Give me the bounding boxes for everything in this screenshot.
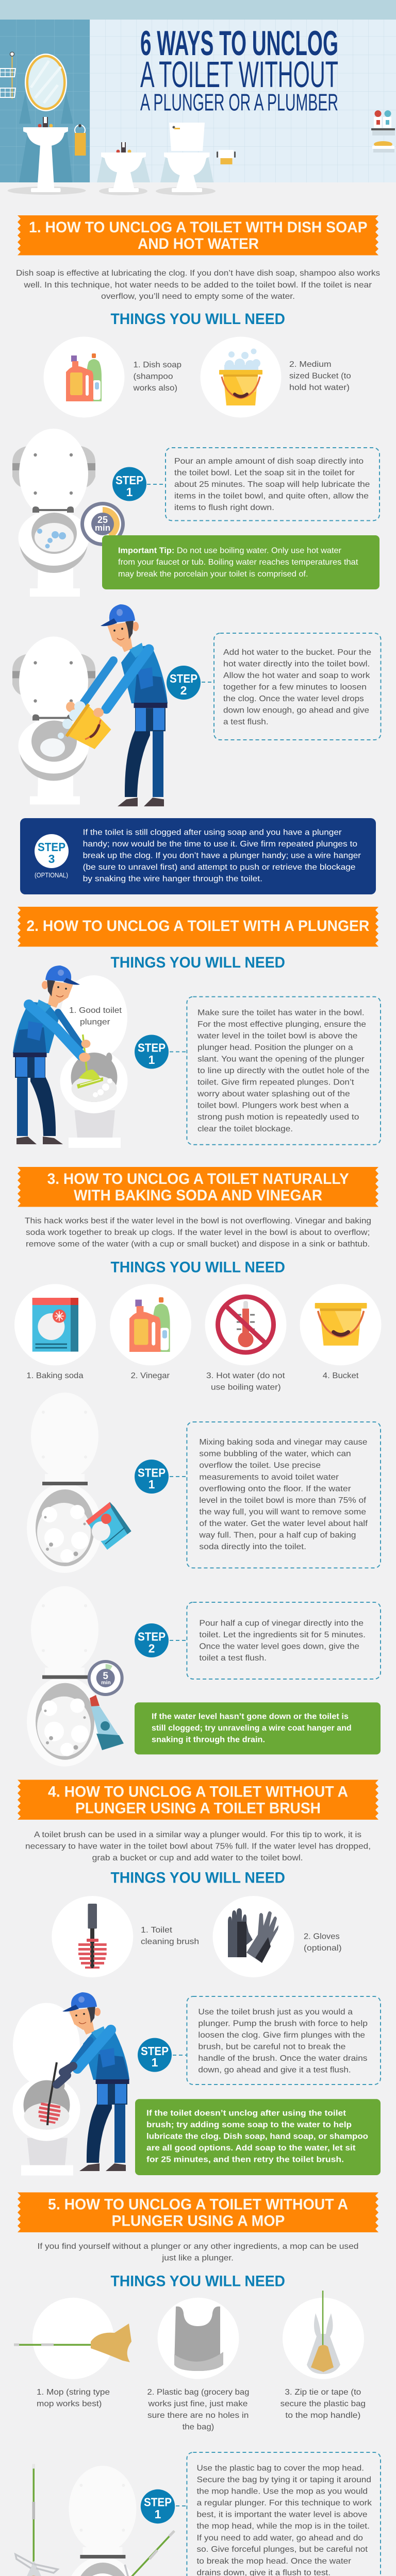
step 1 text box [187,997,381,1145]
item: bucket [200,337,351,417]
item: plunger label [69,1006,122,1026]
step 3 optional panel: handy; now would be the time to use it. Give firm repeated plunges to [83,840,357,849]
timer: 25 min [80,502,125,546]
intro text 3 [25,1217,371,1249]
step 2 badge [135,1623,169,1657]
step 1 text box: to break the mop head. Once the water [197,2557,352,2566]
illustration: plumber using toilet brush [12,1992,129,2176]
item: zip tie: 3. Zip tie or tape (to [285,2388,361,2397]
tip: add soap [135,2099,381,2175]
step 1 badge [141,2489,175,2523]
item: baking soda: 1. Baking soda [26,1371,84,1380]
banner 4: PLUNGER USING A TOILET BRUSH [75,1800,321,1817]
tip: wire coat hanger: snaking it through the drain. [152,1735,265,1744]
timer: 5 min: 5 [103,1671,108,1682]
step 2 text box [187,1602,381,1679]
step 1 badge: 1 [148,1478,155,1491]
step 1 text box [187,1996,381,2084]
banner 3 [18,1167,378,1207]
intro text 4: A toilet brush can be used in a similar way a plunger would. For this tip to work, it is [34,1831,361,1839]
intro text 1 [16,269,380,301]
item: zip tie [280,2291,366,2420]
step 1 text box: handle of the brush. Once the water drains [198,2054,367,2063]
item: bucket: hold hot water) [289,383,350,392]
illustration: toilet with soap and timer [12,429,125,597]
step 1 text box: Use the toilet brush just as you would a [198,2008,353,2016]
step 1 text box: the mop handle. Use the mop as you would [197,2487,368,2496]
heading: things you will need: THINGS YOU WILL NEED [110,311,285,328]
step 3 optional panel: (be sure to unravel first) and attempt to push or retrieve the blockage [83,863,356,872]
step 1 badge: 1 [152,2056,158,2069]
step 1 text box: brush, but be careful not to break the [198,2043,346,2052]
heading: things you will need: THINGS YOU WILL NEED [110,1869,285,1887]
item: zip tie: to the mop handle) [285,2411,360,2420]
step 1 text box: of the water. Get the water level about half [199,1519,368,1528]
item: mop [14,2298,131,2408]
intro text 3: This hack works best if the water level in the bowl is not overflowing. Vinegar and baking [25,1217,371,1225]
item: plastic bag: works just fine, just make [147,2400,248,2408]
item: bucket [300,1284,382,1380]
step 2 text box: together for a few minutes to loosen [223,683,367,691]
step 2 badge: STEP [138,1630,166,1643]
step 1 text box: about 25 minutes. The soap will help lubricate the [174,480,370,489]
step 2 text box: toilet a test flush. [199,1654,267,1663]
tip: add soap: brush; try adding some soap to the water to help [146,2121,352,2129]
heading: things you will need: THINGS YOU WILL NEED [110,2273,285,2290]
heading: things you will need: THINGS YOU WILL NEED [110,1259,285,1276]
step 1 badge [135,1035,169,1069]
item: vinegar [110,1284,191,1380]
illustration: mop in bag [5,2464,63,2576]
step 3 optional panel: STEP [38,840,65,854]
step 3 optional panel: break up the clog. If you don’t have a plunger handy; use a wire hanger [83,852,361,860]
step 1 text box: a regular plunger. For this technique to work [197,2499,372,2507]
item: vinegar: 2. Vinegar [131,1371,170,1380]
header bathroom scene [0,0,396,195]
step 1 text box: down, go ahead and give it a test flush. [198,2066,351,2075]
step 1 text box: best, it is important the water level is above [197,2511,368,2519]
step 1 text box: items to flush right down. [174,503,274,512]
step 1 text box: plunger. Pump the brush with force to help [198,2020,368,2028]
step 1 text box: Use the plastic bag to cover the mop head. [197,2464,364,2473]
step 1 text box: Mixing baking soda and vinegar may cause [199,1438,368,1447]
item: dish soap [43,337,182,417]
tip: add soap: for 25 minutes, and then retry the toilet brush. [146,2156,344,2164]
item: bucket: 2. Medium [289,360,331,369]
item: dish soap: 1. Dish soap [133,361,182,369]
intro text 3: soda work together to break up clogs. If the water level in the bowl is about to overflow; [26,1228,370,1237]
toilet paper [217,150,236,164]
banner 4 [18,1780,378,1820]
step 2 text box: toilet. Let the ingredients sit for 5 minutes. [199,1631,366,1639]
step 1 text box: worry about water splashing out of the [197,1090,350,1098]
step 3 optional panel: 3 [48,852,55,866]
step 2 text box: hot water directly into the toilet bowl. [223,659,370,668]
section 4: toilet brush [12,1780,381,2176]
step 2 text box: Allow the hot water and soap to work [223,671,370,680]
item: gloves [212,1896,342,1977]
step 1 text box: plunger head. Position the plunger on a [197,1043,353,1052]
step 2 text box: down low enough, go ahead and give [223,706,369,715]
banner 5 [18,2192,378,2232]
item: dish soap: works also) [133,384,177,393]
important tip: boiling water: Important Tip: Do not use boiling water. Only use hot water [118,546,342,555]
item: hot water: 3. Hot water (do not [206,1371,285,1380]
step 3 optional panel: If the toilet is still clogged after using soap and you have a plunger [83,828,342,837]
illustration: toilet with vinegar and timer [27,1586,124,1767]
step 1 text box: the way full, you will want to remove some [199,1507,366,1516]
item: gloves: (optional) [304,1944,342,1953]
step 2 badge: 2 [148,1642,155,1655]
item: bucket: 4. Bucket [323,1371,359,1380]
intro text 1: Dish soap is effective at lubricating the clog. If you don’t have dish soap, shampoo also works [16,269,380,278]
item: plastic bag: 2. Plastic bag (grocery bag [147,2388,249,2397]
step 1 text box [187,2452,381,2576]
important tip: boiling water [102,535,380,589]
tip: wire coat hanger: If the water level hasn’t gone down or the toilet is [152,1712,349,1721]
step 1 badge: STEP [144,2496,172,2509]
step 3 optional panel: (OPTIONAL) [35,872,68,879]
timer: 5 min [88,1660,124,1696]
section 3: baking soda and vinegar [14,1167,382,1767]
tip: wire coat hanger [135,1702,381,1754]
step 1 text box: way full. Then, pour a half cup of baking [199,1531,356,1539]
step 3 optional panel: by snaking the wire hanger through the toilet. [83,875,262,884]
intro text 5 [37,2242,358,2263]
item: plunger label: 1. Good toilet [69,1006,122,1015]
banner 2 [18,907,378,947]
step 2 text box: Add hot water to the bucket. Pour the [223,648,371,657]
step 1 text box: For the most effective plunging, ensure the [197,1020,366,1029]
intro text 4: grab a bucket or cup and add water to the toilet bowl. [92,1854,303,1862]
item: baking soda [14,1284,96,1380]
mirror [19,54,73,124]
step 1 badge [138,2038,172,2072]
toilet [156,123,216,195]
banner 1 [18,215,378,256]
towel [75,124,86,156]
important tip: boiling water: from your faucet or tub. Boiling water reaches temperatures that [118,558,358,567]
item: plastic bag: the bag) [183,2423,214,2432]
step 2 badge [167,666,201,700]
section 1: dish soap and hot water [12,215,381,894]
step 1 text box: overflowing onto the floor. If the water [199,1484,351,1493]
banner 4: 4. HOW TO UNCLOG A TOILET WITHOUT A [48,1784,348,1800]
item: plastic bag [147,2298,249,2432]
step 1 badge: 1 [155,2507,161,2521]
bathroom shelves [371,110,395,152]
step 1 text box: slant. You want the opening of the plunger [197,1055,365,1063]
intro text 1: well. In this technique, hot water needs to be added to the toilet bowl. If the toilet is near [23,281,372,290]
illustration: toilet with baking soda [27,1393,131,1573]
step 1 badge: 1 [126,485,133,499]
step 1 text box: water level in the toilet bowl is above the [197,1031,358,1040]
pedestal sink [8,117,86,195]
heading: things you will need: THINGS YOU WILL NEED [110,954,285,971]
step 1 badge: 1 [148,1053,155,1066]
important tip: boiling water: may break the porcelain your toilet is comprised of. [118,570,308,579]
step 1 text box: overflow the toilet. Use precise [199,1461,321,1470]
step 2 text box: the clog. Once the water level drops [223,694,364,703]
item: zip tie: secure the plastic bag [280,2400,366,2408]
intro text 4: necessary to have water in the toilet bowl about 75% full. If the water level has dropped, [25,1842,371,1851]
step 1 text box: level in the toilet bowl is more than 75% of [199,1496,367,1505]
tip: wire coat hanger: still clogged; try unraveling a wire coat hanger and [152,1724,352,1733]
tip: add soap: If the toilet doesn’t unclog after using the toilet [146,2109,346,2117]
timer: 25 min: 25 [97,515,108,525]
step 2 badge: STEP [170,672,197,685]
banner 3: 3. HOW TO UNCLOG A TOILET NATURALLY [47,1171,349,1188]
item: gloves: 2. Gloves [304,1932,340,1941]
step 1 badge [135,1460,169,1494]
step 1 badge: STEP [116,473,143,487]
step 1 text box: If you need to add water, go ahead and do [197,2534,363,2543]
illustration: plumber using plunger [13,965,128,1148]
section 5: mop [5,2192,381,2576]
item: dish soap: (shampoo [133,372,173,381]
step 1 text box: to line up directly with the outlet hole of the [197,1066,370,1075]
step 1 text box: strong push motion is repeatedly used to [197,1113,359,1122]
item: toilet brush: 1. Toilet [141,1926,173,1935]
step 1 text box: some bubbling of the water, which can [199,1450,351,1459]
timer: 5 min: min [101,1680,111,1686]
step 1 text box: clear the toilet blockage. [197,1125,293,1133]
tip: add soap: lubricate the clog. Dish soap, hand soap, or shampoo [146,2132,368,2141]
banner 1: AND HOT WATER [138,235,259,252]
step 1 text box [166,448,380,520]
step 1 badge: STEP [138,1041,166,1054]
item: toilet brush: cleaning brush [141,1938,199,1946]
illustration: toilet with mop [64,2466,174,2576]
item: mop: mop works best) [37,2400,102,2408]
banner 5: 5. HOW TO UNCLOG A TOILET WITHOUT A [48,2196,348,2213]
item: plastic bag: sure there are no holes in [147,2411,249,2420]
step 1 text box: so. Give forceful plunges, but be careful not [197,2545,368,2554]
intro text 1: overflow, you’ll need to empty some of the water. [101,292,295,301]
step 2 text box: Pour half a cup of vinegar directly into the [199,1619,364,1628]
item: toilet brush [52,1896,199,1977]
step 1 text box: measurements to avoid toilet water [199,1473,339,1482]
intro text 5: just like a plunger. [161,2254,234,2263]
item: bucket: sized Bucket (to [289,372,351,381]
step 1 text box [187,1422,381,1568]
illustration: plumber pouring bucket [12,604,168,806]
step 1 text box: the mop head, while the mop is in the toilet. [197,2522,370,2531]
intro text 4 [25,1831,371,1862]
step 1 badge: STEP [138,1466,166,1479]
step 1 badge: STEP [141,2044,169,2058]
bidet [97,142,150,195]
step 1 text box: items in the toilet bowl, and quite often, allow the [174,492,369,501]
step 1 text box: toilet. Give firm repeated plunges. Don’t [197,1078,354,1087]
step 1 text box: Pour an ample amount of dish soap directly into [174,457,364,466]
step 1 text box: soda directly into the toilet. [199,1543,306,1551]
title [140,24,338,115]
step 1 text box: Make sure the toilet has water in the bowl. [197,1008,365,1017]
banner 1: 1. HOW TO UNCLOG A TOILET WITH DISH SOAP [29,219,367,236]
step 3 optional panel [20,818,376,894]
step 1 text box: toilet bowl. Plungers work best when a [197,1101,349,1110]
step 2 text box [214,633,381,740]
item: hot water [205,1284,287,1392]
step 1 text box: the toilet bowl. Let the soap sit in the toilet for [174,469,355,478]
step 1 badge [112,467,146,501]
step 1 text box: loosen the clog. Give firm plunges with the [198,2031,365,2040]
timer: 25 min: min [95,523,110,533]
item: plunger label: plunger [80,1018,110,1026]
section 2: plunger [13,907,381,1148]
banner 3: WITH BAKING SODA AND VINEGAR [74,1187,322,1204]
step 2 text box: Once the water level goes down, give the [199,1642,359,1651]
step 1 text box: Secure the bag by tying it or taping it around [197,2476,371,2484]
intro text 5: If you find yourself without a plunger or any other ingredients, a mop can be used [37,2242,358,2251]
banner 5: PLUNGER USING A MOP [111,2212,285,2229]
item: hot water: use boiling water) [211,1383,281,1392]
intro text 3: remove some of the water (with a cup or small bucket) and dispose in a sink or bathtub. [26,1240,370,1249]
step 2 badge: 2 [180,684,187,697]
item: mop: 1. Mop (string type [37,2388,110,2397]
wall shelf basket [0,52,15,99]
tip: add soap: are all good options. Add soap to the water, let sit [146,2144,356,2153]
banner 2: 2. HOW TO UNCLOG A TOILET WITH A PLUNGER [26,918,370,935]
step 2 text box: a test flush. [223,718,269,726]
